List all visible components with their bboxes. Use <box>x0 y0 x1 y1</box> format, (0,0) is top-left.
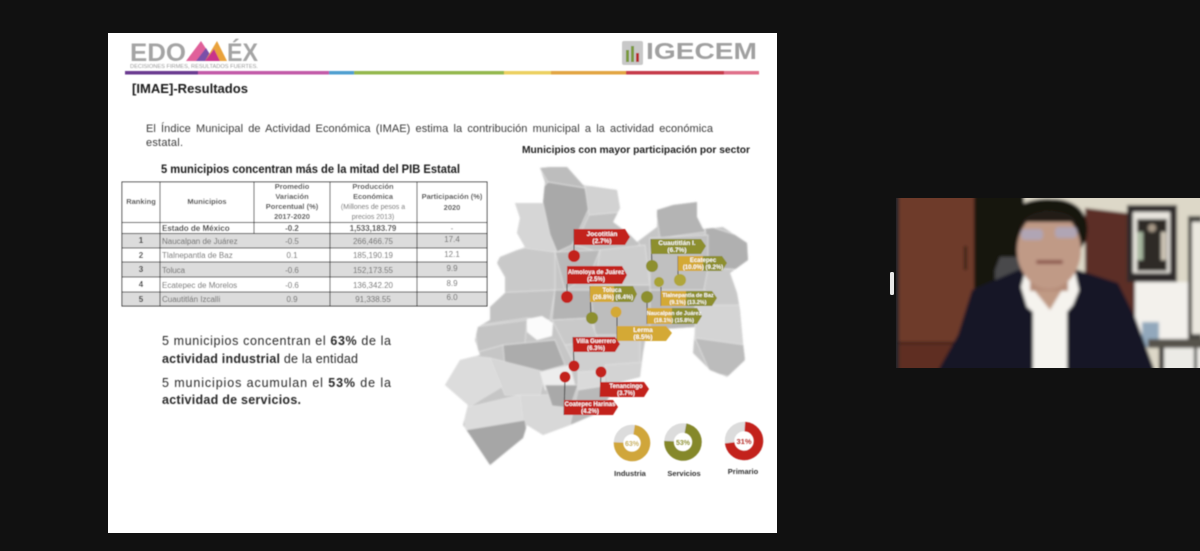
pin: Toluca: Toluca <box>603 288 622 294</box>
table: ranking de municipios: 9.9 <box>446 264 458 273</box>
summary text: actividad industrial: 5 municipios concentran el 63% de la <box>162 334 391 348</box>
pin: Coatepec Harinas: (4.2%) <box>581 409 599 415</box>
pin: Almoloya de Juárez: Almoloya de Juárez <box>568 270 624 276</box>
pin: Toluca: (26.8%) (6.4%) <box>593 295 633 301</box>
table: ranking de municipios: 1,533,183.79 <box>350 224 397 233</box>
pin: Lerma: Lerma <box>633 327 653 334</box>
pin: Naucalpan de Juárez: (18.1%) (15.8%) <box>654 318 694 324</box>
pin: Ecatepec <box>674 256 727 286</box>
donut: Industria: Industria <box>614 469 647 478</box>
table: ranking de municipios: 3 <box>139 265 144 274</box>
table: ranking de municipios: -0.6 <box>285 266 299 275</box>
table: ranking de municipios: 17.4 <box>444 235 460 244</box>
table: ranking de municipios: Producción <box>352 182 394 191</box>
table: ranking de municipios: -0.2 <box>285 224 299 233</box>
summary text: actividad industrial <box>162 334 391 366</box>
pin: Cuautitlán I. <box>646 239 706 272</box>
donut: Industria: 63% <box>625 441 640 448</box>
video: speaker webcam <box>890 192 1200 375</box>
table: ranking de municipios: Cuautitlán Izcalli <box>162 295 220 304</box>
color divider bar <box>125 71 759 74</box>
pin: Naucalpan de Juárez <box>641 291 702 324</box>
logo: IGECEM: IGECEM <box>646 38 757 64</box>
pin: Tlalnepantla de Baz <box>654 277 717 306</box>
donut: Servicios <box>666 425 701 478</box>
heading: IMAE resultados: [IMAE]-Resultados <box>132 81 248 96</box>
pin: Toluca <box>586 286 637 324</box>
summary text: actividad industrial: actividad industrial de la entidad <box>162 352 358 366</box>
pin: Coatepec Harinas <box>560 372 618 415</box>
pin: Cuautitlán I.: Cuautitlán I. <box>658 240 696 247</box>
table title: 5 municipios concentran más de la mitad del PIB Estatal <box>161 164 460 176</box>
table: ranking de municipios: Estado de México <box>162 224 230 233</box>
table: ranking de municipios: 152,173.55 <box>353 266 394 275</box>
table: ranking de municipios: -0.6 <box>285 281 299 290</box>
pin: Tlalnepantla de Baz: (9.1%) (13.2%) <box>670 300 707 306</box>
table: ranking de municipios: Naucalpan de Juárez <box>162 237 238 246</box>
table: ranking de municipios: 91,338.55 <box>355 295 391 304</box>
pin: Ecatepec: Ecatepec <box>690 258 717 264</box>
map heading: Municipios con mayor participación por sector <box>522 144 750 156</box>
table: ranking de municipios: precios 2013) <box>352 214 394 221</box>
pin: Jocotitlán: (2.7%) <box>592 238 612 245</box>
donut: Servicios: 53% <box>676 440 691 447</box>
table: ranking de municipios: Ranking <box>126 197 156 206</box>
donut: Primario <box>728 425 760 476</box>
pin: Coatepec Harinas: Coatepec Harinas <box>565 402 616 408</box>
table: ranking de municipios: 12.1 <box>444 250 460 259</box>
table: ranking de municipios: Municipios <box>187 197 227 206</box>
video panel handle <box>890 272 894 295</box>
map: Estado de México <box>440 160 755 470</box>
table: ranking de municipios: -0.5 <box>285 237 299 246</box>
table: ranking de municipios: Variación <box>275 192 309 201</box>
table: ranking de municipios: 4 <box>139 280 144 289</box>
summary text: actividad de servicios: 5 municipios acumulan el 53% de la <box>162 376 391 390</box>
logo: EDOMEX: ÉX <box>227 38 258 67</box>
pin: Lerma <box>610 306 672 341</box>
donut: Primario: 31% <box>736 437 752 446</box>
table: ranking de municipios <box>122 182 487 306</box>
table: ranking de municipios: 2 <box>139 251 144 260</box>
pin: Tenancingo <box>596 366 649 397</box>
donut: Industria <box>614 427 648 478</box>
pin: Cuautitlán I.: (6.7%) <box>667 247 687 254</box>
table: ranking de municipios: 1 <box>139 236 144 245</box>
pin: Tenancingo: (3.7%) <box>617 391 635 397</box>
pin: Tlalnepantla de Baz: Tlalnepantla de Baz <box>662 293 714 299</box>
table: ranking de municipios: - <box>451 224 454 233</box>
table: ranking de municipios: Participación (%) <box>422 192 483 201</box>
pin: Naucalpan de Juárez: Naucalpan de Juárez <box>647 311 702 317</box>
table: ranking de municipios: 266,466.75 <box>353 237 394 246</box>
donut: Servicios: Servicios <box>667 469 701 478</box>
pin: Villa Guerrero: (6.3%) <box>587 346 605 352</box>
donut: Primario: Primario <box>728 467 759 476</box>
table: ranking de municipios: 136,342.20 <box>353 281 394 290</box>
table: ranking de municipios: 0.1 <box>286 251 298 260</box>
pin: Almoloya de Juárez: (2.5%) <box>587 277 605 283</box>
table: ranking de municipios: Promedio <box>275 182 310 191</box>
table: ranking de municipios: Toluca <box>162 266 186 275</box>
logo: EDOMEX: DECISIONES FIRMES, RESULTADOS FUERTES. <box>130 64 258 70</box>
table: ranking de municipios: 2020 <box>444 203 460 212</box>
table: ranking de municipios: 185,190.19 <box>353 251 394 260</box>
table: ranking de municipios: Ecatepec de Morelos <box>162 281 237 290</box>
intro text block: El Índice Municipal de Actividad Económica (IMAE) estima la contribución municipal a la actividad económica <box>146 122 714 135</box>
table: ranking de municipios: 8.9 <box>446 279 458 288</box>
table: ranking de municipios: 5 <box>139 295 144 304</box>
summary text: actividad de servicios <box>162 376 391 407</box>
intro text block: estatal. <box>146 137 183 149</box>
table: ranking de municipios: Económica <box>353 192 394 201</box>
pin: Tenancingo: Tenancingo <box>609 384 643 390</box>
table: ranking de municipios: 2017-2020 <box>274 212 310 221</box>
table: ranking de municipios: 6.0 <box>446 293 458 302</box>
pin: Villa Guerrero <box>568 337 620 372</box>
pin: Lerma: (8.5%) <box>633 334 653 341</box>
table: ranking de municipios: 0.9 <box>286 295 298 304</box>
pin: Almoloya de Juárez <box>561 266 627 303</box>
logo: IGECEM <box>622 38 757 65</box>
pin: Jocotitlán: Jocotitlán <box>587 231 617 238</box>
intro text block <box>146 122 714 149</box>
logo: EDOMEX <box>130 38 258 70</box>
pin: Ecatepec: (10.0%) (9.2%) <box>683 265 723 271</box>
pin: Villa Guerrero: Villa Guerrero <box>576 339 616 345</box>
table: ranking de municipios: Porcentual (%) <box>266 202 319 211</box>
summary text: actividad de servicios: actividad de servicios. <box>162 393 301 407</box>
pin: Jocotitlán <box>568 229 630 262</box>
panel: presentation slide <box>108 33 777 533</box>
logo: EDOMEX: EDO <box>130 39 186 67</box>
table: ranking de municipios: (Millones de pesos a <box>341 204 405 211</box>
table: ranking de municipios: Tlalnepantla de Baz <box>162 251 233 260</box>
